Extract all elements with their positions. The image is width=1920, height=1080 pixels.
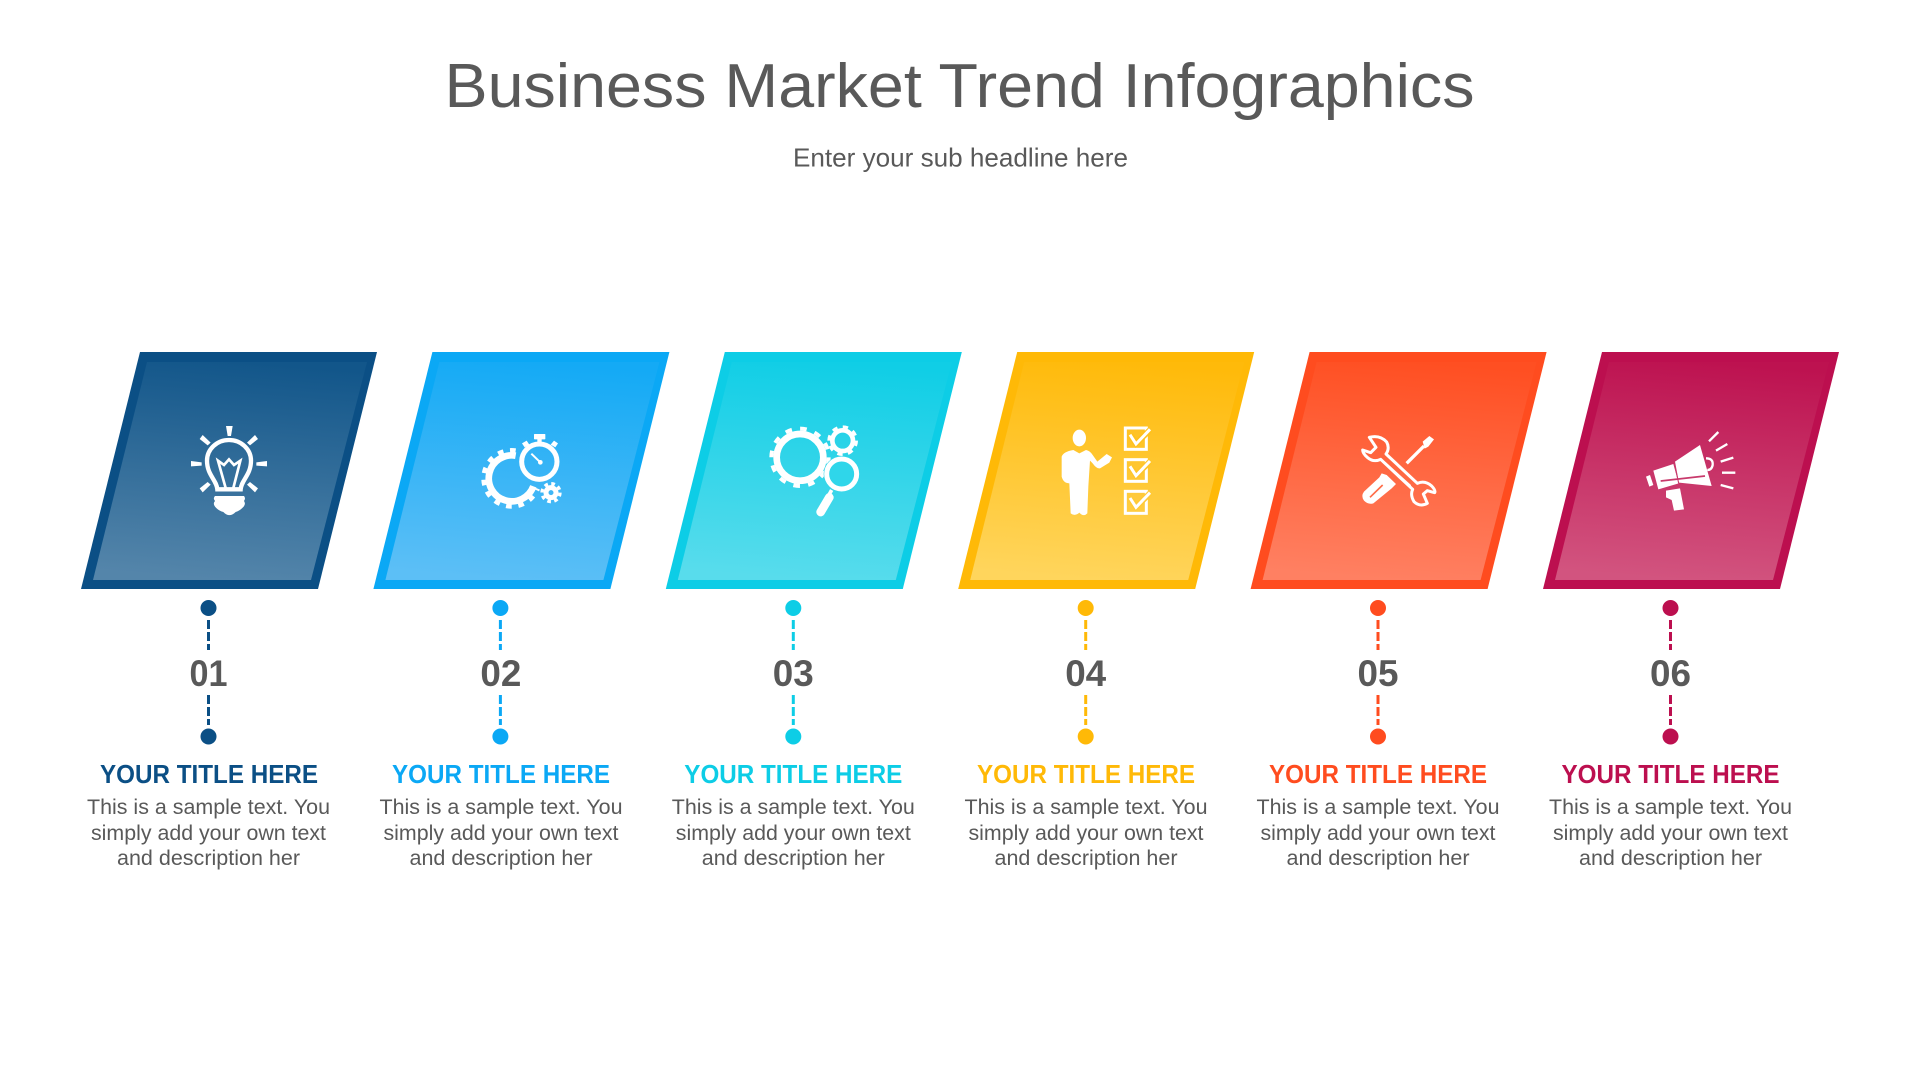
icon: light bulb [191,426,267,515]
text block 02: and description her [410,847,592,870]
text block 04: This is a sample text. You [964,796,1208,819]
text block 02 [380,759,622,870]
text block 03: This is a sample text. You [672,796,915,819]
connector with number 05 [1358,600,1398,744]
text block 05: This is a sample text. You [1256,796,1500,819]
text block 06 [1549,759,1792,870]
text block 05: simply add your own text [1260,822,1496,845]
parallelogram card 01 [81,352,377,589]
connector with number 02 [480,600,521,744]
connector with number 04 [1065,600,1107,744]
parallelogram card 06 [1543,352,1839,589]
icon: gears and magnifier [771,427,860,512]
connector with number 03: 03 [773,653,814,694]
text block 06: and description her [1579,847,1762,870]
text block 04: and description her [994,847,1178,870]
text block 01: YOUR TITLE HERE [100,759,318,789]
connector with number 01: 01 [190,653,228,694]
icon: presenter with checklist [1062,428,1150,515]
icon: megaphone [1646,432,1735,511]
text block 06: YOUR TITLE HERE [1562,759,1780,789]
text block 03 [672,759,915,870]
title: Business Market Trend Infographics [444,52,1474,121]
connector with number 02: 02 [480,653,521,694]
panel: step 02 [373,352,669,870]
text block 01: and description her [117,847,300,870]
panel: step 04 [958,352,1254,870]
text block 02: This is a sample text. You [380,796,622,819]
text block 01 [87,759,330,870]
text block 06: simply add your own text [1553,822,1788,845]
icon: wrench and screwdriver [1362,436,1435,505]
text block 03: simply add your own text [676,822,911,845]
connector with number 03 [773,600,814,744]
text block 04: YOUR TITLE HERE [977,759,1195,789]
text block 01: simply add your own text [91,822,326,845]
icon: gears and stopwatch [484,434,560,506]
text block 04 [964,759,1208,870]
connector with number 01 [190,600,228,744]
connector with number 06 [1650,600,1691,744]
connector with number 04: 04 [1065,653,1107,694]
parallelogram card 03 [666,352,962,589]
panel: step 05 [1251,352,1547,870]
text block 03: YOUR TITLE HERE [684,759,902,789]
connector with number 06: 06 [1650,653,1691,694]
parallelogram card 05 [1251,352,1547,589]
connector with number 05: 05 [1358,653,1398,694]
text block 04: simply add your own text [968,822,1204,845]
text block 01: This is a sample text. You [87,796,330,819]
text block 02: simply add your own text [384,822,619,845]
text block 02: YOUR TITLE HERE [392,759,610,789]
text block 05: and description her [1286,847,1470,870]
text block 05: YOUR TITLE HERE [1269,759,1487,789]
parallelogram card 02 [373,352,669,589]
panel: step 03 [666,352,962,870]
panel: step 06 [1543,352,1839,870]
panel: step 01 [81,352,377,870]
text block 03: and description her [702,847,885,870]
parallelogram card 04 [958,352,1254,589]
subtitle: Enter your sub headline here [793,142,1128,172]
text block 05 [1256,759,1500,870]
text block 06: This is a sample text. You [1549,796,1792,819]
